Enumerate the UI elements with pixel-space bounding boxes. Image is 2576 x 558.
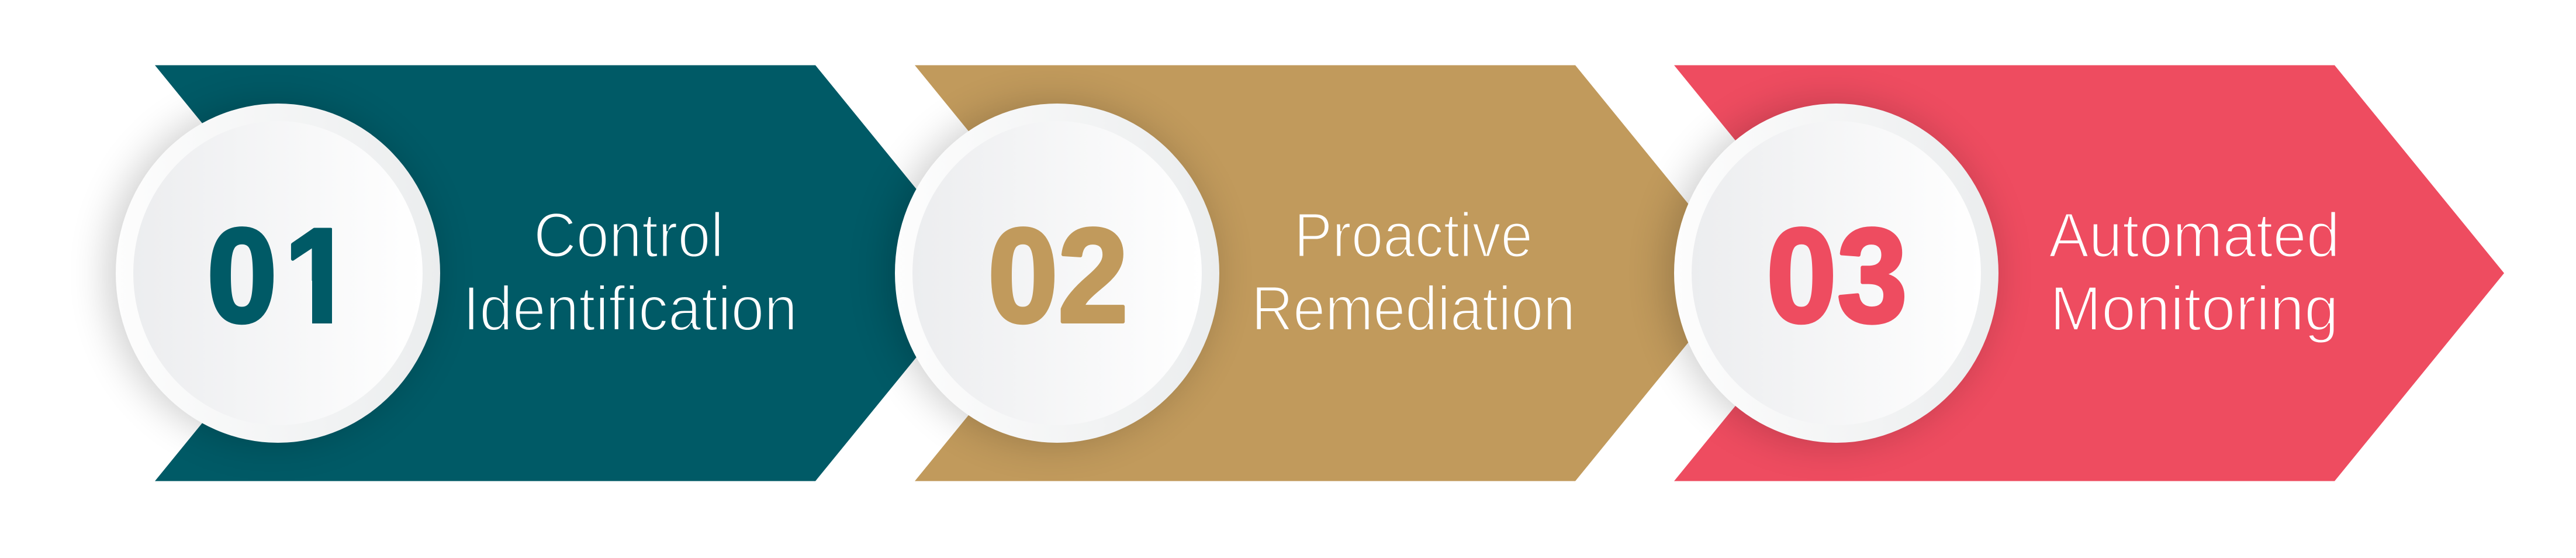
label: Control Identification: Control bbox=[534, 199, 724, 270]
circle shadow: step 2 bbox=[887, 104, 1215, 443]
process diagram bbox=[91, 66, 2504, 481]
circle badge: step 2 bbox=[895, 104, 1219, 443]
number: 02: 0 bbox=[988, 201, 1058, 350]
label: Control Identification bbox=[463, 199, 797, 344]
step 3: automated monitoring bbox=[1666, 66, 2504, 481]
label: Automated Monitoring bbox=[2049, 199, 2340, 344]
label: Proactive Remediation: Remediation bbox=[1251, 273, 1575, 344]
number: 01: 0 bbox=[207, 201, 277, 350]
label: Control Identification: Identification bbox=[463, 273, 797, 344]
label: Automated Monitoring: Monitoring bbox=[2050, 273, 2339, 344]
number: 02: 2 bbox=[1058, 201, 1128, 350]
step 2: proactive remediation bbox=[887, 66, 1745, 481]
circle badge: step 3 bbox=[1674, 104, 1998, 443]
circle shadow: step 3 bbox=[1666, 104, 1994, 443]
chevron: step 1 bbox=[155, 66, 985, 481]
step 1: control identification bbox=[108, 66, 985, 481]
circle badge: step 1 bbox=[116, 104, 440, 443]
number: 03: 3 bbox=[1837, 201, 1907, 350]
chevron: step 3 bbox=[1674, 66, 2504, 481]
number: 03: 0 bbox=[1766, 201, 1837, 350]
label: Automated Monitoring: Automated bbox=[2049, 199, 2340, 270]
number: 01 bbox=[210, 226, 332, 325]
number: 03 bbox=[1766, 201, 1907, 350]
number: 02 bbox=[988, 201, 1128, 350]
chevron: step 2 bbox=[915, 66, 1745, 481]
label: Proactive Remediation: Proactive bbox=[1294, 199, 1533, 270]
circle shadow: step 1 bbox=[108, 104, 435, 443]
number: 01: 1 bbox=[284, 201, 354, 350]
label: Proactive Remediation bbox=[1251, 199, 1575, 344]
